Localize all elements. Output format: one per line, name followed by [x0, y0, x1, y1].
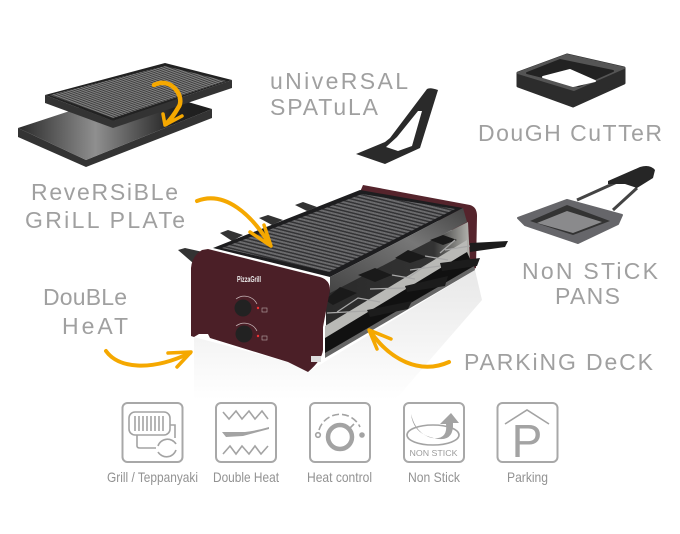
illustration: non stick pan [518, 166, 655, 243]
arrow: parking deck [369, 330, 449, 367]
arrow: flip plate [154, 83, 182, 125]
feature label: double heat: Double Heat [213, 469, 279, 485]
icon: parking [498, 403, 558, 467]
label: non stick pans: NoN STiCK [522, 258, 659, 284]
grill top plate [213, 190, 463, 277]
control knobs [234, 296, 267, 342]
rating badge [311, 356, 321, 362]
parked pans [325, 235, 457, 305]
label: non stick pans [522, 258, 659, 309]
floor reflection [194, 270, 482, 400]
icon: heat control [310, 403, 370, 462]
icon: grill teppanyaki [122, 403, 182, 462]
rear burgundy housing [360, 185, 477, 272]
icon: double heat [216, 403, 276, 462]
arrow: double heat [106, 351, 191, 367]
label: universal spatula: SPATuLA [270, 94, 379, 120]
icon: parking: P [512, 415, 542, 467]
feature label: heat control: Heat control [307, 469, 372, 485]
feature label: parking: Parking [507, 469, 548, 485]
pan arms [327, 240, 470, 313]
illustration: reversible plate trays [18, 63, 232, 167]
icon: non stick [404, 403, 464, 462]
parking deck black strip [325, 252, 474, 355]
parking deck silver strip [325, 240, 467, 340]
logo: PizzaGrill [237, 275, 261, 284]
pan handles [367, 241, 508, 317]
front burgundy panel [191, 249, 330, 372]
feature label: grill teppanyaki: Grill / Teppanyaki [107, 469, 198, 485]
label: double heat: HeAT [62, 313, 128, 339]
rear tabs [178, 202, 317, 263]
feature label: non stick: Non Stick [408, 469, 461, 485]
label: double heat [43, 284, 128, 339]
label: dough cutter: DouGH CuTTeR [478, 120, 662, 146]
inner chamber [326, 222, 470, 352]
label: parking deck: PARKiNG DeCK [464, 349, 654, 375]
label: reversible grill plate: ReveRSiBLe [31, 179, 178, 205]
label: universal spatula [270, 68, 408, 120]
arrow: reversible grill plate [197, 198, 271, 246]
label: reversible grill plate [25, 179, 185, 233]
label: double heat: DouBLe [43, 284, 127, 310]
label: universal spatula: uNiveRSAL [270, 68, 408, 94]
illustration: dough cutter [518, 55, 624, 106]
label: reversible grill plate: GRiLL PLATe [25, 207, 185, 233]
icon: non stick: NON STICK [410, 448, 458, 458]
label: non stick pans: PANS [555, 283, 620, 309]
illustration: spatula [356, 88, 438, 164]
illustration: raclette grill [178, 185, 508, 372]
